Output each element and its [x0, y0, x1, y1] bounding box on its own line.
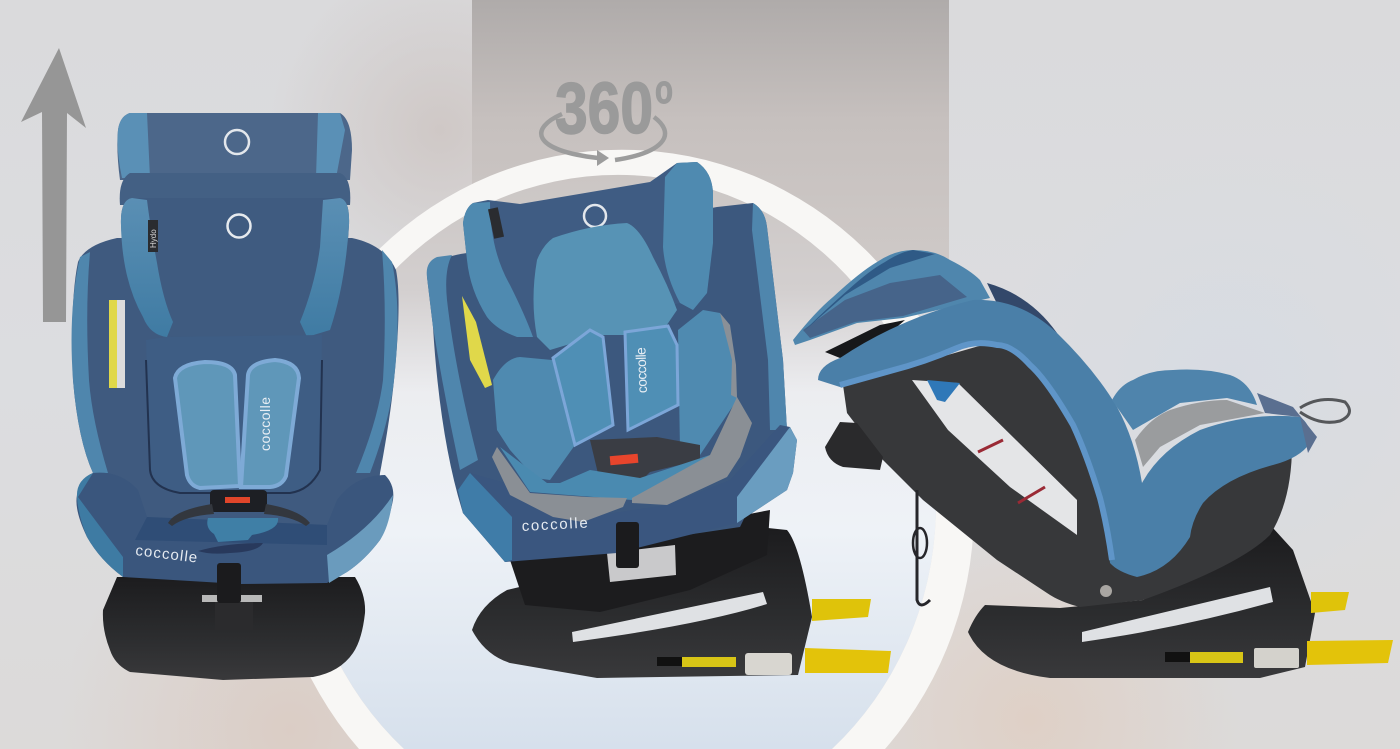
front headrest: [121, 198, 349, 338]
isofix bars: [1165, 592, 1393, 668]
back instruction sticker: [912, 380, 1077, 535]
strap hook: [913, 490, 930, 605]
shell: [427, 203, 787, 562]
swivel mechanism: [607, 545, 676, 582]
base instruction sticker: [1082, 587, 1273, 642]
headrest: [793, 250, 990, 358]
coccolle logo: coccolle: [521, 515, 588, 535]
small headrest tags: [148, 220, 158, 252]
recline button: [1100, 585, 1112, 597]
infant head insert: [534, 223, 677, 350]
seat cushion front: [458, 425, 797, 562]
back fabric side: [818, 300, 1310, 577]
housing under seat: [510, 510, 770, 612]
left seat: front view with raised headrest: [72, 113, 399, 680]
top raised headrest: [117, 113, 352, 180]
adjustment knob: [825, 422, 883, 470]
harness pads: coccolle: [257, 397, 273, 451]
top tether loop: [1300, 400, 1349, 422]
height adjust arrow: [21, 48, 86, 322]
swivel mechanism: [202, 595, 262, 630]
crotch pad: [198, 518, 278, 554]
isofix bars: [657, 599, 891, 675]
harness pads: [175, 360, 299, 488]
isofix base: [103, 577, 365, 680]
rear shell: [843, 340, 1292, 607]
outer shell: [72, 238, 399, 530]
middle headrest: [120, 173, 350, 205]
buckle and straps: [168, 490, 310, 526]
coccolle logo: coccolle: [135, 542, 198, 567]
base instruction sticker: [572, 592, 767, 642]
harness pads: coccolle: [632, 347, 650, 393]
centre seat: three-quarter view: [427, 162, 891, 678]
small headrest tags: Hydo: [149, 229, 158, 248]
mesh pads: [492, 397, 752, 522]
buckle: [590, 437, 700, 482]
harness pads: [553, 326, 678, 445]
side body pads: [493, 310, 737, 480]
yellow warning label: [462, 296, 492, 388]
front strap: [616, 522, 639, 568]
360 degree rotation icon: 360: [555, 69, 653, 149]
upper rear cover: [987, 283, 1057, 333]
seat cushion: [76, 473, 393, 584]
blue seat floor: [500, 447, 710, 500]
light blue piping: [840, 343, 1112, 560]
front strap: [217, 563, 241, 603]
base: [968, 528, 1315, 678]
360 degree rotation icon: o: [655, 68, 673, 112]
seat cushion and mesh: [1112, 370, 1317, 467]
base: [472, 528, 812, 678]
harness panel: [146, 335, 322, 493]
headrest: [463, 162, 713, 337]
yellow warning label: [109, 300, 125, 388]
white rotation ring: [270, 150, 974, 749]
right seat: side view reclined: [793, 250, 1393, 678]
